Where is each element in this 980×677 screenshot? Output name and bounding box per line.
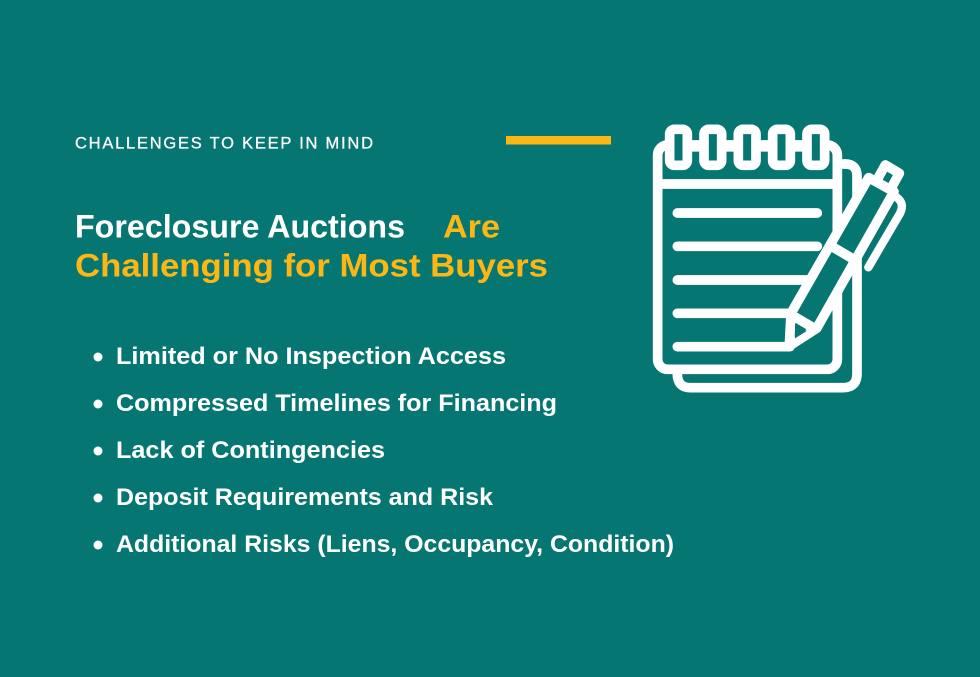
pen nib hole <box>795 324 807 338</box>
pen clicker <box>877 165 899 187</box>
pen body <box>789 178 894 346</box>
title <box>75 208 548 284</box>
ruled lines <box>677 213 817 347</box>
bullet: deposit requirements: Deposit Requirements and Risk <box>116 484 494 511</box>
accent bar <box>506 136 611 144</box>
eyebrow heading: CHALLENGES TO KEEP IN MIND <box>75 134 373 152</box>
title: Challenging for Most Buyers <box>75 248 548 284</box>
title: Foreclosure Auctions <box>75 208 405 244</box>
bullet list <box>94 343 674 558</box>
spiral rings <box>670 129 825 165</box>
pen clip <box>868 197 902 267</box>
bullet: contingencies: Lack of Contingencies <box>116 437 385 464</box>
bullet: inspection access: Limited or No Inspection Access <box>116 343 506 370</box>
bullet: financing timelines: Compressed Timelines for Financing <box>116 390 557 417</box>
bullet: additional risks: Additional Risks (Liens, Occupancy, Condition) <box>116 531 674 558</box>
ring connectors <box>687 136 807 160</box>
back sheet <box>677 164 857 388</box>
icon: notepad and pen <box>658 129 902 388</box>
pen nib divider <box>792 315 816 329</box>
pen band <box>833 247 856 261</box>
front sheet <box>658 145 837 369</box>
header rule <box>658 169 837 198</box>
title: Are <box>443 208 500 244</box>
